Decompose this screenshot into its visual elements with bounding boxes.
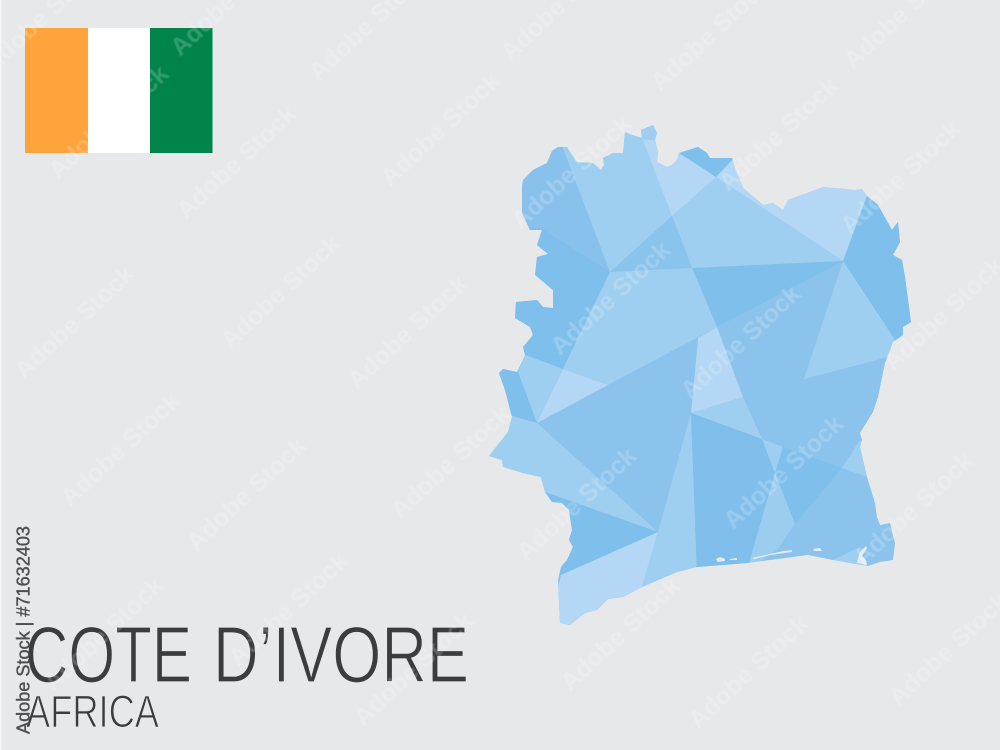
watermark text pattern: Adobe Stock bbox=[718, 410, 849, 534]
watermark text pattern: Adobe Stock bbox=[55, 387, 186, 511]
watermark text pattern: Adobe Stock bbox=[348, 607, 479, 731]
stock image id, vertical: Adobe Stock | #71632403 bbox=[14, 526, 34, 734]
continent subtitle: AFRICA bbox=[26, 686, 159, 737]
watermark text pattern: Adobe Stock bbox=[342, 270, 473, 394]
watermark text pattern: Adobe Stock bbox=[675, 280, 806, 404]
watermark text pattern: Adobe Stock bbox=[506, 110, 637, 234]
watermark text pattern: Adobe Stock bbox=[555, 572, 686, 696]
watermark text pattern: Adobe Stock bbox=[511, 442, 642, 566]
watermark text pattern: Adobe Stock bbox=[848, 447, 979, 571]
country title: COTE bbox=[25, 610, 192, 699]
watermark text pattern: Adobe Stock bbox=[215, 230, 346, 354]
watermark text pattern: Adobe Stock bbox=[38, 572, 169, 696]
low-poly map of Cote d'Ivoire bbox=[489, 125, 911, 625]
country title bbox=[25, 610, 469, 699]
lagoons bbox=[716, 546, 867, 565]
country title: D’IVORE bbox=[213, 610, 469, 699]
watermark text pattern: Adobe Stock bbox=[683, 610, 814, 734]
watermark text pattern: Adobe Stock bbox=[385, 400, 516, 524]
watermark text pattern: Adobe Stock bbox=[713, 72, 844, 196]
watermark text pattern: Adobe Stock bbox=[835, 115, 966, 239]
flag of Cote d'Ivoire bbox=[25, 28, 212, 153]
watermark text pattern: Adobe Stock bbox=[171, 100, 302, 224]
watermark text pattern: Adobe Stock bbox=[181, 432, 312, 556]
watermark text pattern: Adobe Stock bbox=[545, 236, 676, 360]
watermark text pattern: Adobe Stock bbox=[223, 547, 354, 671]
watermark text pattern: Adobe Stock bbox=[43, 60, 174, 184]
watermark text pattern: Adobe Stock bbox=[9, 260, 140, 384]
watermark text pattern: Adobe Stock bbox=[375, 67, 506, 191]
